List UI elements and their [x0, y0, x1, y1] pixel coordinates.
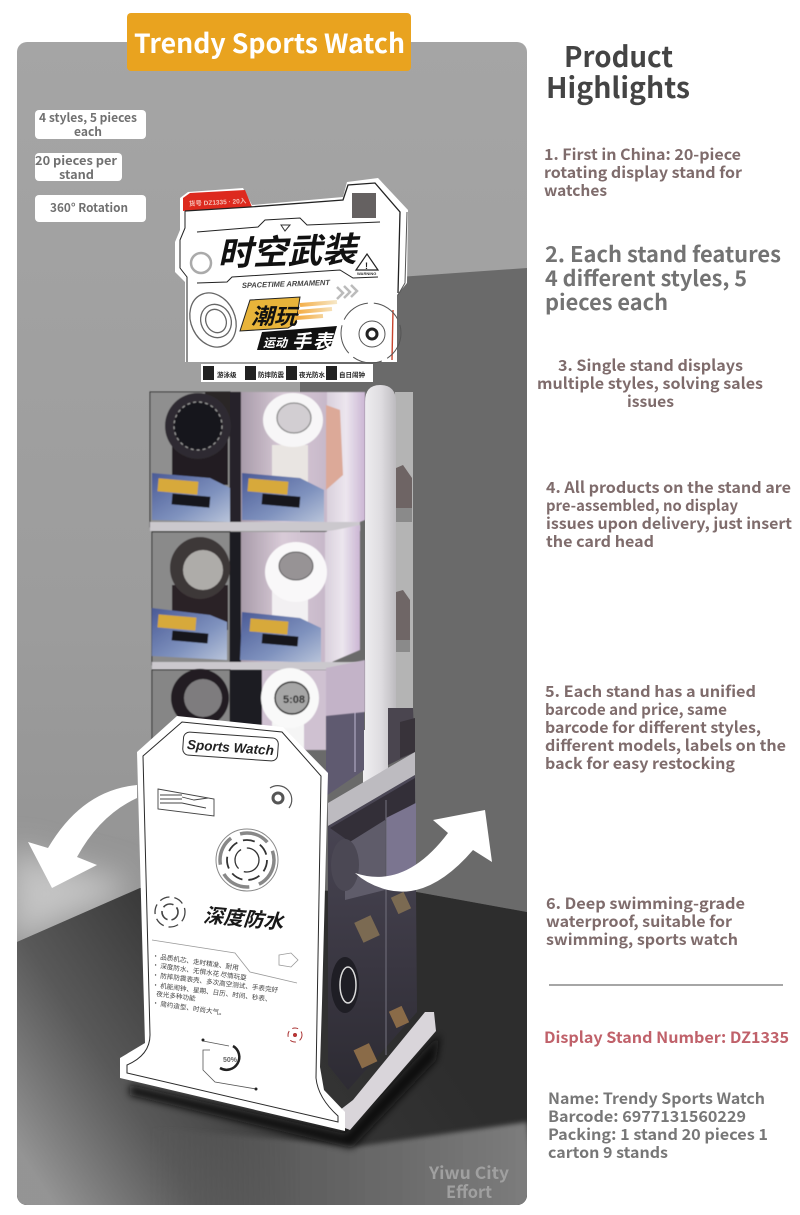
product details: Name: Trendy Sports Watch [548, 1087, 765, 1109]
product card: top right [242, 473, 324, 522]
highlight 5 [545, 680, 786, 774]
arrow: rotate right [355, 810, 492, 892]
heading: product highlights: Product [564, 35, 673, 76]
stand: lower acrylic cases [328, 775, 417, 1090]
highlight 4: 4. All products on the stand are [546, 476, 791, 498]
highlight 4 [546, 476, 792, 552]
stand: bottom tier watches [152, 660, 365, 750]
stand: shelf [328, 752, 415, 826]
board: feature list [152, 950, 279, 1017]
product card: middle left [152, 608, 227, 660]
feature tag: pieces per stand [35, 152, 122, 183]
highlight 1 [544, 143, 742, 201]
sign: warning triangle: ! [365, 261, 368, 271]
highlight 5: 5. Each stand has a unified [545, 680, 756, 702]
board: feature list: • 防摔防震表壳、多次高空测试、手表完好 [152, 969, 279, 994]
stand: white base [340, 1012, 436, 1130]
stand: rear case and window [326, 708, 415, 796]
sign: subtitle: SPACETIME ARMAMENT [242, 278, 331, 290]
board: feature list: • 机能闹钟、星期、日历、时间、秒表、 [152, 979, 272, 1004]
highlight 6 [546, 892, 745, 950]
feature tag: pieces per stand: 20 pieces per [35, 152, 118, 169]
display stand [120, 178, 436, 1131]
board: feature list: • 简约造型、时尚大气。 [152, 997, 226, 1017]
product details: Barcode: 6977131560229 [548, 1105, 746, 1127]
feature tag: rotation: 360° Rotation [50, 199, 128, 216]
sign: gear dial [341, 303, 401, 363]
highlight 3 [537, 354, 763, 412]
sign: bottom feature strip: 防摔防震 [258, 369, 284, 379]
sign: chevrons [337, 285, 357, 299]
highlight 6: waterproof, suitable for [546, 910, 732, 932]
board: red target [288, 1028, 302, 1042]
highlight 6: 6. Deep swimming-grade [546, 892, 745, 914]
board: small ring [270, 786, 292, 808]
stand: upper rear column [363, 385, 413, 790]
stand: top tier watches [150, 392, 365, 535]
sign: heading: 时空武装 [217, 222, 362, 276]
board: feature list: • 深度防水、无惧水花 尽情玩耍 [152, 959, 248, 982]
highlight 5: barcode and price, same [545, 698, 727, 720]
sign: warning triangle: WARNING [357, 271, 376, 276]
watch: black middle [170, 537, 230, 630]
sign: bottom feature strip: 夜光防水 [299, 369, 326, 379]
sign: product logo: 运动 [263, 334, 289, 351]
feature tag: styles: 4 styles, 5 pieces [39, 109, 137, 126]
sign: product logo: 潮玩 [251, 299, 300, 331]
highlight 4: the card head [546, 530, 654, 552]
board: 50 percent gauge: 50% [223, 1057, 238, 1064]
board: feature list: • 品质机芯、走时精准、耐用 [152, 950, 239, 972]
sign: line-art watch [181, 285, 245, 355]
sign: bottom feature strip [201, 364, 373, 382]
product details: Packing: 1 stand 20 pieces 1 [548, 1123, 768, 1145]
highlight 2: pieces each [545, 286, 668, 317]
watch: white middle [265, 542, 327, 625]
stand: middle tier watches [152, 525, 360, 670]
highlight 2 [545, 238, 781, 317]
sign: product logo: 手表 [292, 327, 334, 354]
board: sports watch plaque [182, 732, 279, 761]
sign: gear ornament [191, 253, 211, 273]
sign: bottom feature strip: 自日闹钟 [339, 369, 366, 379]
board: feature list: 夜光多种功能 [156, 988, 197, 1003]
front display board [120, 716, 345, 1131]
watermark: Effort [446, 1178, 492, 1203]
heading: product highlights [546, 35, 690, 107]
panel: product photo background [10, 42, 540, 1215]
highlight 6: swimming, sports watch [546, 928, 738, 950]
arrow: rotate left [28, 785, 137, 888]
board: arrow tag icon [279, 953, 298, 967]
sign: bottom feature strip: 游泳级 [217, 369, 237, 379]
sign: red model tag: 货号 DZ1335 · 20入 [189, 196, 247, 208]
feature tag: styles: each [74, 123, 102, 140]
board: divider [152, 940, 297, 983]
watermark [428, 1159, 509, 1203]
highlight 1: watches [544, 179, 607, 201]
board: 50 percent gauge [202, 1038, 258, 1090]
title banner [127, 13, 411, 71]
board: circuit icon [158, 789, 214, 816]
board: gear ring [155, 897, 185, 927]
header sign [175, 178, 408, 382]
board: waterproof heading: 深度防水 [202, 899, 287, 935]
product details: carton 9 stands [548, 1141, 668, 1163]
feature tag: rotation [35, 195, 146, 222]
highlight 4: issues upon delivery, just insert [546, 512, 792, 534]
sign: QR code [352, 193, 376, 218]
sign: red model tag [183, 190, 252, 211]
highlight 2: 2. Each stand features [545, 238, 781, 269]
display stand number: Display Stand Number: DZ1335 [544, 1026, 789, 1048]
highlight 2: 4 different styles, 5 [545, 262, 747, 293]
watch: black top [165, 392, 231, 485]
highlight 3: issues [627, 390, 674, 412]
heading: product highlights: Highlights [546, 66, 690, 107]
sign: warning triangle [356, 254, 378, 276]
watermark: Yiwu City [428, 1159, 509, 1184]
highlight 3: 3. Single stand displays [558, 354, 743, 376]
product card: middle right [240, 612, 321, 663]
board: large dial [216, 829, 278, 891]
product card: top left [152, 473, 230, 522]
title banner: Trendy Sports Watch [134, 22, 405, 61]
sign: product logo [240, 297, 337, 354]
highlight 1: rotating display stand for [544, 161, 742, 183]
watch: white bottom: 5:08 [283, 694, 305, 706]
highlight 5: back for easy restocking [545, 752, 735, 774]
feature tag: pieces per stand: stand [59, 166, 94, 183]
product details [548, 1087, 768, 1163]
highlight 5: different models, labels on the [545, 734, 786, 756]
highlight 1: 1. First in China: 20-piece [544, 143, 741, 165]
highlight 5: barcode for different styles, [545, 716, 761, 738]
watch: white top [263, 393, 323, 485]
highlight 4: pre-assembled, no display [546, 494, 738, 516]
feature tag: styles [35, 109, 146, 140]
board: sports watch plaque: Sports Watch [187, 737, 274, 758]
highlight 3: multiple styles, solving sales [537, 372, 763, 394]
watch: black bottom [171, 669, 229, 727]
watch: white bottom [261, 668, 319, 750]
